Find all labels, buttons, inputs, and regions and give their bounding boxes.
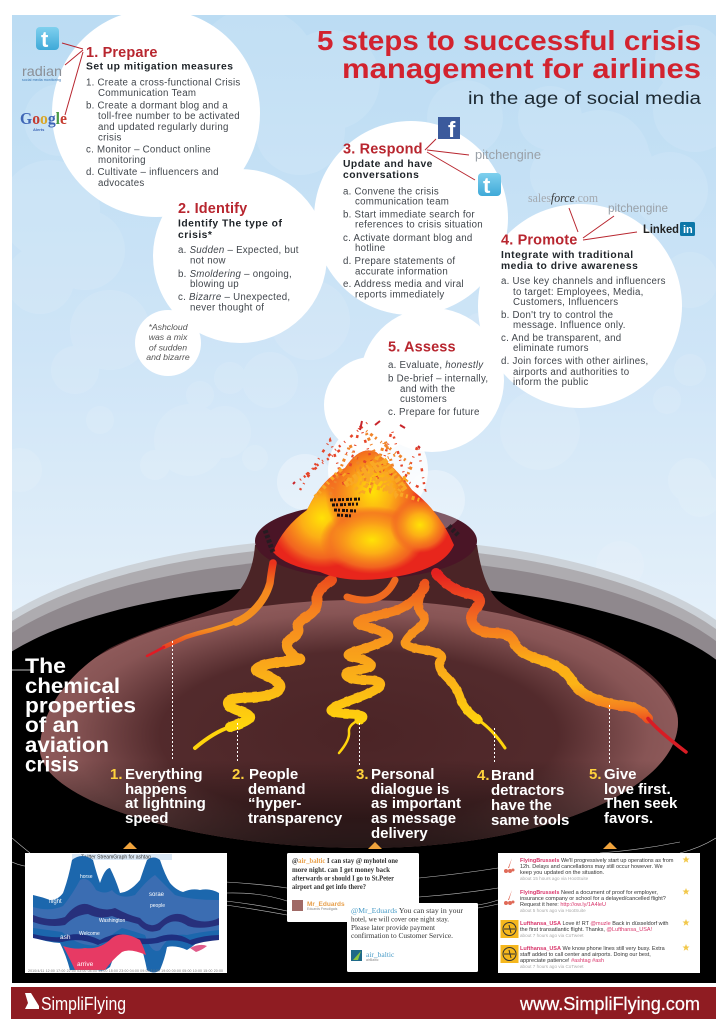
footer band (11, 987, 716, 1019)
connector lines: step 4 (569, 208, 637, 240)
callout: ashcloud note: was a mix (149, 332, 188, 342)
title: 5 steps to successful crisis (317, 25, 701, 56)
panel: step 1 prepare: 1. Create a cross-functional Crisis (86, 78, 240, 88)
tweet card: airline reply: @Mr_Eduards You can stay in your (351, 906, 464, 915)
panel: step 3 respond: a. Convene the crisis (343, 186, 439, 198)
property 4: have the (491, 797, 552, 814)
tweet panel: airlines: the first transatlantic flight. Thanks, @Lufthansa_USA! (520, 927, 653, 933)
tweet panel: airlines: about 15 hours ago via HootSuite (520, 876, 589, 881)
panel: step 5 assess: and with the (400, 384, 455, 395)
property 1 (110, 766, 206, 827)
panel: step 3 respond: reports immediately (355, 290, 444, 300)
panel: step 1 prepare: b. Create a dormant blog and a (86, 100, 228, 112)
property 2: People (249, 766, 298, 783)
property 3: 3. (356, 766, 369, 783)
chart: twitter streamgraph: 2010/4/11 12:00 17:00 22:00 03:00 08:00 13:00 18:00 23:00 04:00 09:00 14:00 19:00 00:00 05:00 10:00 15:00 20:00 (28, 969, 223, 973)
chart: twitter streamgraph: arrive (77, 961, 94, 968)
property 5 (589, 766, 678, 827)
tweet card: airline reply: air_baltic (366, 950, 395, 959)
platform rings and black ground (0, 538, 728, 983)
icon: salesforce, pitchengine, linkedin: pitchengine (608, 201, 668, 215)
panel: step 4 promote: c. And be transparent, and (501, 333, 621, 344)
panel: step 2 identify: c. Bizarre – Unexpected, (178, 292, 290, 303)
clouds behind eruption (277, 420, 465, 530)
panel: step 4 promote: to target: Employees, Media, (513, 287, 644, 298)
panel: step 2 identify: blowing up (190, 279, 239, 290)
chart: twitter streamgraph: horse (80, 874, 93, 880)
property 4: same tools (491, 812, 569, 829)
tweet panel: airlines (498, 853, 700, 973)
tweet panel: airlines: 12h. Delays and cancellations may still occur however. We (520, 864, 663, 870)
dotted leader lines (172, 641, 610, 765)
panel: step 4 promote: 4. Promote (501, 232, 577, 248)
panel: step 4 promote: message. Influence only. (513, 320, 626, 331)
callout: ashcloud note: of sudden (149, 342, 187, 352)
property 1: happens (125, 781, 187, 798)
chart: twitter streamgraph: Welcome (79, 931, 100, 937)
property 5: Give (604, 766, 637, 783)
white cover for page margin above sky (0, 0, 728, 15)
panel: step 1 prepare: and updated regularly during (98, 122, 229, 133)
panel: step 2 identify: crisis* (178, 230, 212, 241)
panel: step 3 respond: hotline (355, 243, 385, 254)
chart: twitter streamgraph: sorae (149, 892, 165, 898)
panel: step 4 promote: b. Don't try to control the (501, 310, 613, 321)
icon: simpliflying tail (25, 993, 39, 1009)
title: management for airlines (342, 53, 701, 84)
speech bubbles (52, 9, 682, 453)
icon: facebook, pitchengine, twitter: t (483, 173, 491, 198)
eruption (265, 421, 465, 590)
heading: chemical properties (25, 654, 136, 776)
chart: twitter streamgraph: flight (49, 899, 62, 905)
icon: salesforce, pitchengine, linkedin (528, 190, 695, 236)
tweet card: airline reply: hotel, we will cover one night stay. (351, 914, 449, 924)
panel: step 1 prepare: Communication Team (98, 88, 196, 99)
panel: step 5 assess: b De-brief – internally, (388, 374, 488, 384)
panel: step 3 respond: references to crisis situation (355, 220, 483, 230)
heading: chemical properties: aviation (25, 733, 109, 757)
icon: salesforce, pitchengine, linkedin: in (683, 224, 693, 236)
panel: step 1 prepare: advocates (98, 178, 145, 189)
panel: step 5 assess: c. Prepare for future (388, 407, 480, 418)
tweet panel: airlines: Lufthansa_USA We know phone lines still very busy. Extra (520, 946, 666, 952)
panel: step 5 assess: a. Evaluate, honestly (388, 360, 484, 371)
panel: step 1 prepare: toll-free number to be activated (98, 111, 240, 122)
panel: step 5 assess: 5. Assess (388, 340, 456, 356)
icon: twitter, radian, google alerts: radian (22, 63, 62, 79)
title (317, 25, 701, 84)
panel: step 2 identify: b. Smoldering – ongoing, (178, 269, 292, 280)
panel: step 3 respond: accurate information (355, 266, 448, 278)
property 3: delivery (371, 825, 428, 842)
icon: facebook, pitchengine, twitter (438, 117, 541, 198)
panel: step 4 promote: a. Use key channels and influencers (501, 276, 666, 287)
chart: twitter streamgraph (25, 853, 227, 973)
tweet panel: airlines: about 5 hours ago via HootSuite (520, 908, 586, 913)
tweet card: airline reply: airBaltic (366, 958, 379, 962)
property 2: 2. (232, 766, 245, 783)
tweet card: passenger: more night. can I get money back (292, 865, 391, 874)
callout: ashcloud note: and bizarre (146, 352, 190, 362)
property 5: 5. (589, 766, 602, 783)
panel: step 3 respond: e. Address media and viral (343, 279, 464, 290)
panel: step 3 respond (343, 142, 483, 300)
icon: twitter, radian, google alerts: Alerts (33, 127, 45, 132)
property 3: Personal (371, 766, 434, 783)
chart: twitter streamgraph: ash (60, 934, 71, 941)
lava rivers (147, 563, 686, 753)
volcano body (37, 503, 681, 870)
panel: step 1 prepare: d. Cultivate – influencers and (86, 167, 219, 178)
callout: ashcloud note: *Ashcloud (148, 322, 189, 332)
chart: twitter streamgraph: Twitter StreamGraph for ashtag (81, 854, 151, 860)
tweet card: airline reply (347, 903, 478, 972)
panel: step 1 prepare: crisis (98, 132, 122, 144)
tweet card: passenger: airport and get info there? (292, 882, 366, 891)
property 2: transparency (248, 810, 343, 827)
panel: step 2 identify: Identify The type of (178, 218, 282, 230)
tweet panel: airlines: Lufthansa_USA Love it! RT @muzle Back in düsseldorf with (520, 921, 668, 927)
arrow: to streamgraph (123, 842, 137, 849)
connector lines: step 1 (62, 43, 83, 115)
tweet card: passenger: Mr_Eduards (307, 901, 345, 908)
property 3 (356, 766, 461, 842)
heading: chemical properties: crisis (25, 752, 79, 776)
panel: step 4 promote: Integrate with traditional (501, 250, 634, 261)
panel: step 3 respond: b. Start immediate search for (343, 210, 475, 220)
panel: step 4 promote: media to drive awareness (501, 261, 638, 272)
icon: salesforce, pitchengine, linkedin: salesforce.com (528, 190, 598, 205)
panel: step 3 respond: c. Activate dormant blog and (343, 233, 473, 244)
panel: step 1 prepare: 1. Prepare (86, 45, 158, 61)
panel: step 3 respond: d. Prepare statements of (343, 256, 455, 267)
property 1: speed (125, 810, 168, 827)
tweet panel: airlines: appreciate patience! #ashtag #ash (520, 958, 604, 964)
panel: step 2 identify: 2. Identify (178, 201, 247, 217)
tweet panel: airlines: about 7 hours ago via CoTweet (520, 933, 584, 938)
property 4 (477, 767, 569, 829)
panel: step 4 promote: Customers, Influencers (513, 297, 618, 308)
property 1: at lightning (125, 795, 206, 812)
panel: step 1 prepare: monitoring (98, 155, 146, 166)
tweet panel: airlines: about 7 hours ago via CoTweet (520, 964, 584, 969)
property 2: demand (248, 781, 306, 798)
connector lines: step 3 (425, 139, 475, 180)
property 1: 1. (110, 766, 123, 783)
panel: step 4 promote: d. Join forces with other airlines, (501, 356, 648, 367)
icon: twitter, radian, google alerts: Google (20, 109, 67, 128)
property 2: “hyper- (248, 795, 301, 812)
property 3: dialogue is (371, 781, 449, 798)
property 4: Brand (491, 767, 534, 784)
tweet card: passenger: @air_baltic I can stay @ myhotel one (292, 856, 399, 865)
panel: step 3 respond: conversations (343, 170, 419, 181)
icon: salesforce, pitchengine, linkedin: Linked (643, 224, 679, 236)
tweet panel: airlines: FlyingBrussels We'll progressively start up operations as from (520, 858, 674, 864)
tweet card: airline reply: confirmation to Customer Service. (351, 931, 453, 940)
property 5: Then seek (604, 795, 678, 812)
arrow: to tweets (368, 842, 382, 849)
panel: step 2 identify: not now (190, 256, 226, 266)
chart: twitter streamgraph: Washington (99, 918, 125, 924)
panel: step 3 respond: 3. Respond (343, 142, 423, 158)
property 3: as important (371, 795, 461, 812)
tweet panel: airlines: insurance company or school for a delayed/cancelled flight? (520, 896, 666, 902)
sky background (0, 8, 728, 655)
property 1: Everything (125, 766, 203, 783)
panel: step 3 respond: communication team (355, 196, 449, 208)
panel: step 4 promote: eliminate rumors (513, 343, 589, 354)
property 5: favors. (604, 810, 653, 827)
panel: step 1 prepare: Set up mitigation measures (86, 62, 233, 72)
panel: step 2 identify (178, 201, 299, 314)
tweet card: passenger: afterwards or should I go to St.Peter (292, 874, 395, 882)
chart: twitter streamgraph: people (150, 903, 165, 909)
tweet card: airline reply: Please later provide payment (351, 923, 436, 932)
icon: twitter, radian, google alerts: social media monitoring (22, 78, 61, 82)
property 4: detractors (491, 782, 564, 799)
property 3: as message (371, 810, 456, 827)
icon: twitter, radian, google alerts (20, 27, 67, 132)
tweet panel: airlines: staff added to call center and airports. Doing our best, (520, 952, 651, 958)
panel: step 5 assess: customers (400, 394, 447, 405)
panel: step 4 promote: inform the public (513, 377, 588, 388)
tweet panel: airlines: keep you updated on the situation. (520, 870, 605, 876)
panel: step 4 promote: airports and authorities to (513, 367, 629, 378)
panel: step 3 respond: Update and have (343, 159, 433, 170)
property 2 (232, 766, 343, 827)
heading: chemical properties: properties (25, 694, 136, 718)
panel: step 1 prepare: c. Monitor – Conduct online (86, 144, 211, 156)
heading: chemical properties: chemical (25, 674, 120, 698)
panel: step 1 prepare (86, 45, 240, 189)
logo text: SimpliFlying (41, 994, 126, 1014)
icon: twitter, radian, google alerts: t (41, 27, 49, 52)
tweet card: passenger (287, 853, 419, 922)
panel: step 2 identify: a. Sudden – Expected, but (178, 245, 299, 256)
property 4: 4. (477, 767, 490, 784)
panel: step 5 assess (388, 340, 488, 418)
panel: step 2 identify: never thought of (190, 302, 264, 314)
arrow: to airline tweets (603, 842, 617, 849)
icon: facebook, pitchengine, twitter: f (448, 117, 456, 142)
heading: chemical properties: The (25, 654, 66, 678)
tweet panel: airlines: FlyingBrussels Need a document of proof for employer, (520, 890, 658, 896)
property 5: love first. (604, 781, 671, 798)
tweet card: passenger: Eduards Freudigais (307, 907, 338, 911)
panel: step 4 promote (501, 232, 666, 388)
heading: chemical properties: of an (25, 713, 79, 737)
tweet panel: airlines: Request it here: http://ow.ly/1A4leU (520, 902, 606, 908)
icon: facebook, pitchengine, twitter: pitchengine (475, 147, 541, 162)
website: www.SimpliFlying.com (519, 994, 700, 1014)
subtitle: in the age of social media (468, 88, 701, 108)
callout: ashcloud note (146, 322, 190, 362)
